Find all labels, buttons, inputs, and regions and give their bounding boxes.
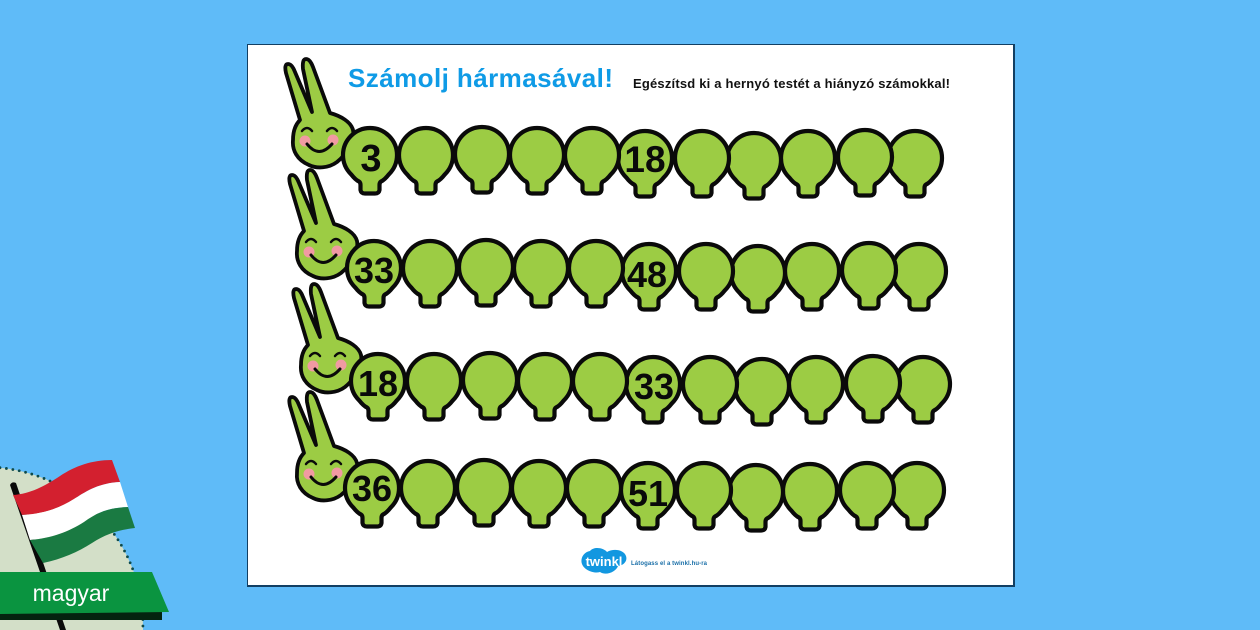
caterpillar row 1: 18 [624,139,666,180]
caterpillar row 4: 51 [628,473,668,514]
worksheet paper [247,44,1015,587]
instruction text: Egészítsd ki a hernyó testét a hiányzó számokkal! [633,76,950,91]
language badge group [0,460,169,630]
title: Számolj hármasával! [348,63,613,93]
dotted circle backdrop [0,468,143,630]
flag pole [10,482,66,630]
caterpillar row 2: 48 [627,254,667,295]
caterpillar row 2 [289,170,946,312]
caterpillar row 1 [285,59,942,198]
footer link text: Látogass el a twinkl.hu-ra [631,561,708,567]
caterpillar row 3: 18 [358,363,398,404]
caterpillar row 1: 3 [360,138,382,180]
caterpillar row 2: 33 [354,250,394,291]
caterpillar row 3: 33 [634,366,674,407]
caterpillar row 4: 36 [352,468,392,509]
label ribbon [0,572,169,614]
Hungarian flag [13,460,135,563]
label ribbon shadow [0,610,162,620]
twinkl logo: twinkl [586,554,622,569]
caterpillar row 4 [289,392,944,530]
caterpillar row 3 [293,284,950,424]
twinkl logo [581,548,626,574]
language label: magyar [33,580,110,606]
